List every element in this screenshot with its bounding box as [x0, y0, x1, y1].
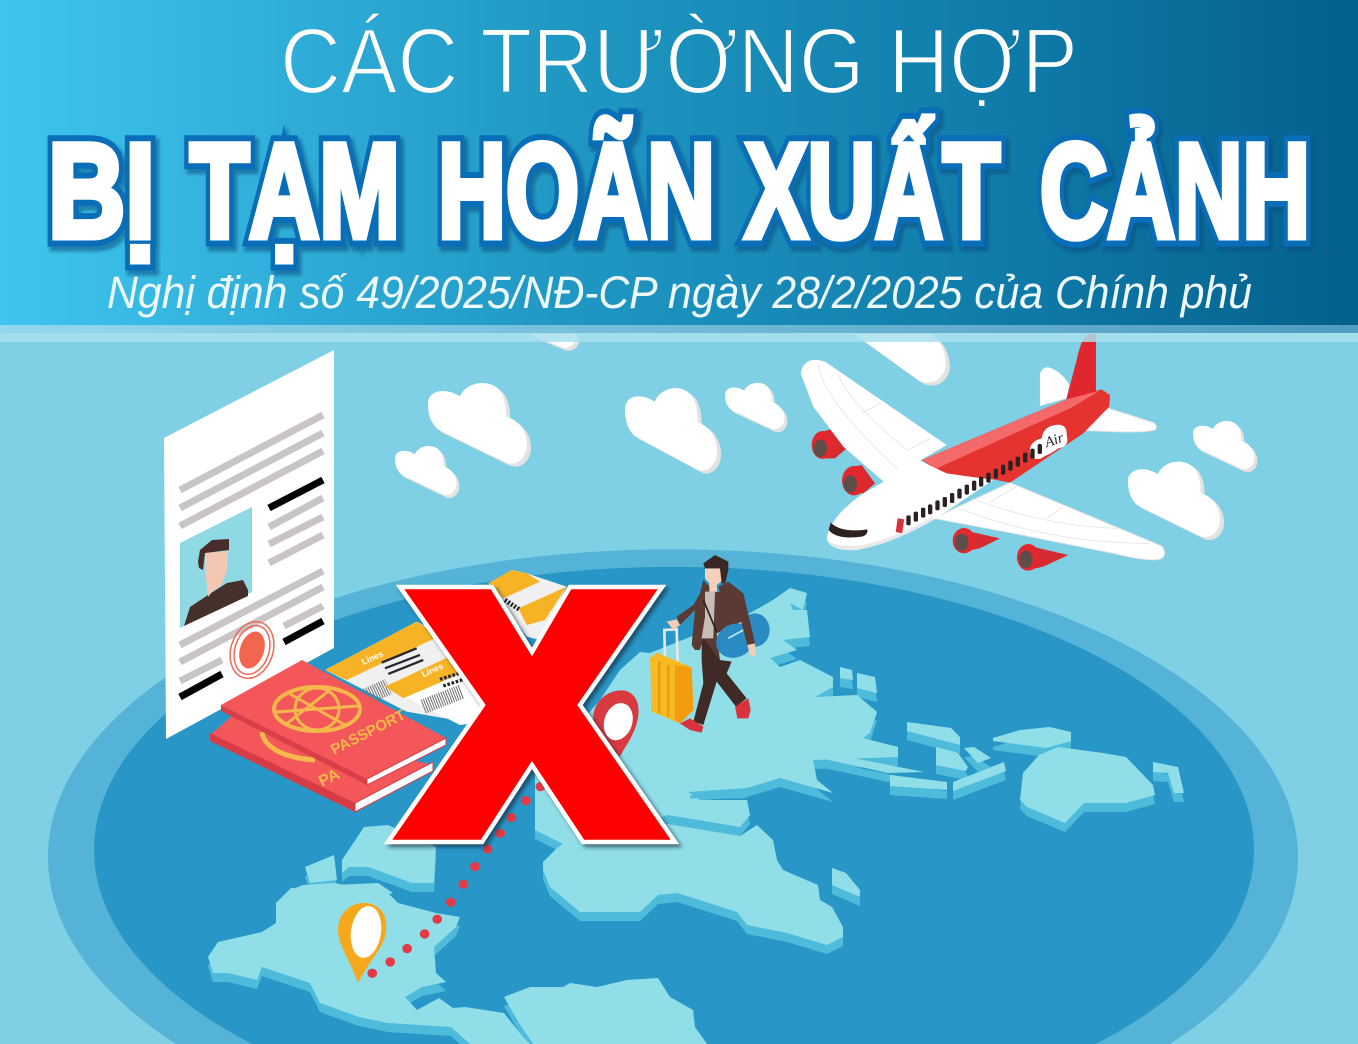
shoulder strap — [703, 600, 717, 632]
cloud 7 — [1128, 462, 1220, 537]
fuselage front — [827, 461, 993, 550]
blue bag back — [740, 613, 770, 647]
title outline: HOÃN — [438, 117, 715, 266]
red stamp — [223, 616, 281, 684]
passport top: PASSPORT — [328, 706, 408, 759]
rear fuselage red — [922, 389, 1110, 483]
lower wing — [933, 483, 1165, 560]
land: Madagascar — [832, 868, 860, 897]
cabin windows — [906, 453, 1027, 525]
header band — [0, 0, 1358, 325]
title white fill — [48, 116, 1310, 266]
photo — [180, 507, 252, 628]
title outline: TẠM — [190, 117, 400, 266]
title white fill: BỊ — [48, 117, 155, 266]
passports — [210, 660, 446, 812]
wing lines — [818, 365, 930, 470]
ticket 1 — [325, 622, 493, 723]
land: Greenland — [342, 825, 436, 883]
hair — [703, 555, 728, 583]
land: Southeast Asia islands — [815, 722, 1071, 791]
upper wing — [801, 360, 947, 490]
trousers — [693, 638, 747, 725]
title outline — [48, 116, 1310, 266]
globe: outer ring — [48, 549, 1298, 1044]
ticket 2: Lines — [420, 661, 445, 679]
land: Australia — [1020, 747, 1155, 823]
title line 1: CÁC TRƯỜNG HỢP — [280, 9, 1078, 113]
neck and face — [705, 568, 723, 592]
map: thin seas across Eurasia — [668, 790, 762, 833]
cloud 4 — [725, 383, 784, 429]
land: Arctic islands — [276, 855, 393, 917]
title outline: BỊ — [48, 117, 155, 266]
shirt — [702, 592, 715, 638]
title white fill: TẠM — [190, 117, 400, 266]
title shadow — [51, 120, 1313, 270]
header lower strip — [0, 325, 1358, 333]
lower engines — [953, 528, 1068, 571]
right stabilizer — [1072, 408, 1156, 432]
passport bottom — [210, 716, 433, 812]
title shadow: BỊ — [51, 121, 158, 270]
subtitle: Nghị định số 49/2025/NĐ-CP ngày 28/2/2025 của Chính phủ — [107, 267, 1252, 318]
shoes — [680, 698, 751, 733]
suitcase body — [650, 653, 693, 723]
translucent sky strip — [0, 333, 1358, 342]
land: New Zealand — [1153, 762, 1184, 793]
left stabilizer — [1040, 367, 1069, 406]
aircraft door — [896, 518, 904, 533]
airline logo — [1030, 425, 1067, 459]
traveller — [667, 555, 770, 733]
title white fill: XUẤT — [745, 116, 1000, 266]
document sheet — [164, 350, 334, 739]
icon: red map pin — [593, 690, 639, 757]
cloud 8 — [1193, 421, 1254, 469]
title shadow: TẠM — [193, 121, 403, 270]
airline logo: Air — [1042, 430, 1066, 451]
globe: ocean — [94, 567, 1254, 1044]
passport bottom: PA — [316, 766, 343, 791]
suitcase handle — [664, 629, 678, 664]
airplane — [801, 334, 1165, 571]
title outline: XUẤT — [745, 116, 1000, 266]
document text lines — [180, 415, 323, 681]
tail fin — [1066, 334, 1096, 401]
land: South America — [504, 978, 707, 1044]
title white fill: HOÃN — [438, 117, 715, 266]
ticket 3 behind X — [488, 570, 567, 640]
ticket 2 — [385, 647, 507, 725]
cockpit window — [829, 523, 867, 537]
title shadow: XUẤT — [748, 120, 1003, 270]
title shadow: HOÃN — [441, 121, 718, 270]
land: Eurasia — [535, 588, 898, 850]
cloud 2 — [395, 446, 456, 495]
route: red dotted line — [367, 782, 545, 978]
title line 2 — [48, 116, 1313, 270]
rolling suitcase — [650, 629, 693, 723]
jacket — [677, 580, 755, 660]
land: North America — [208, 883, 530, 1044]
cloud 1 — [428, 383, 527, 464]
engines far — [812, 429, 875, 495]
cloud 3 — [625, 388, 717, 470]
boarding passes — [325, 622, 507, 725]
icon: yellow map pin — [338, 903, 386, 983]
passport globe — [274, 687, 360, 731]
cloud 6 — [530, 334, 576, 348]
jacket sleeve over bag — [738, 593, 755, 645]
land: small northern islands — [840, 667, 877, 693]
document — [164, 350, 334, 739]
cloud 5 — [854, 334, 946, 383]
map: continents — [208, 588, 1184, 1044]
bag highlight — [728, 630, 743, 638]
passport top — [221, 660, 446, 785]
document black lines — [180, 480, 323, 697]
ticket 1: Lines — [360, 648, 385, 667]
hands — [667, 619, 756, 657]
big red X mark — [388, 587, 675, 842]
land: Africa — [543, 824, 843, 945]
blue bag front — [710, 617, 760, 664]
